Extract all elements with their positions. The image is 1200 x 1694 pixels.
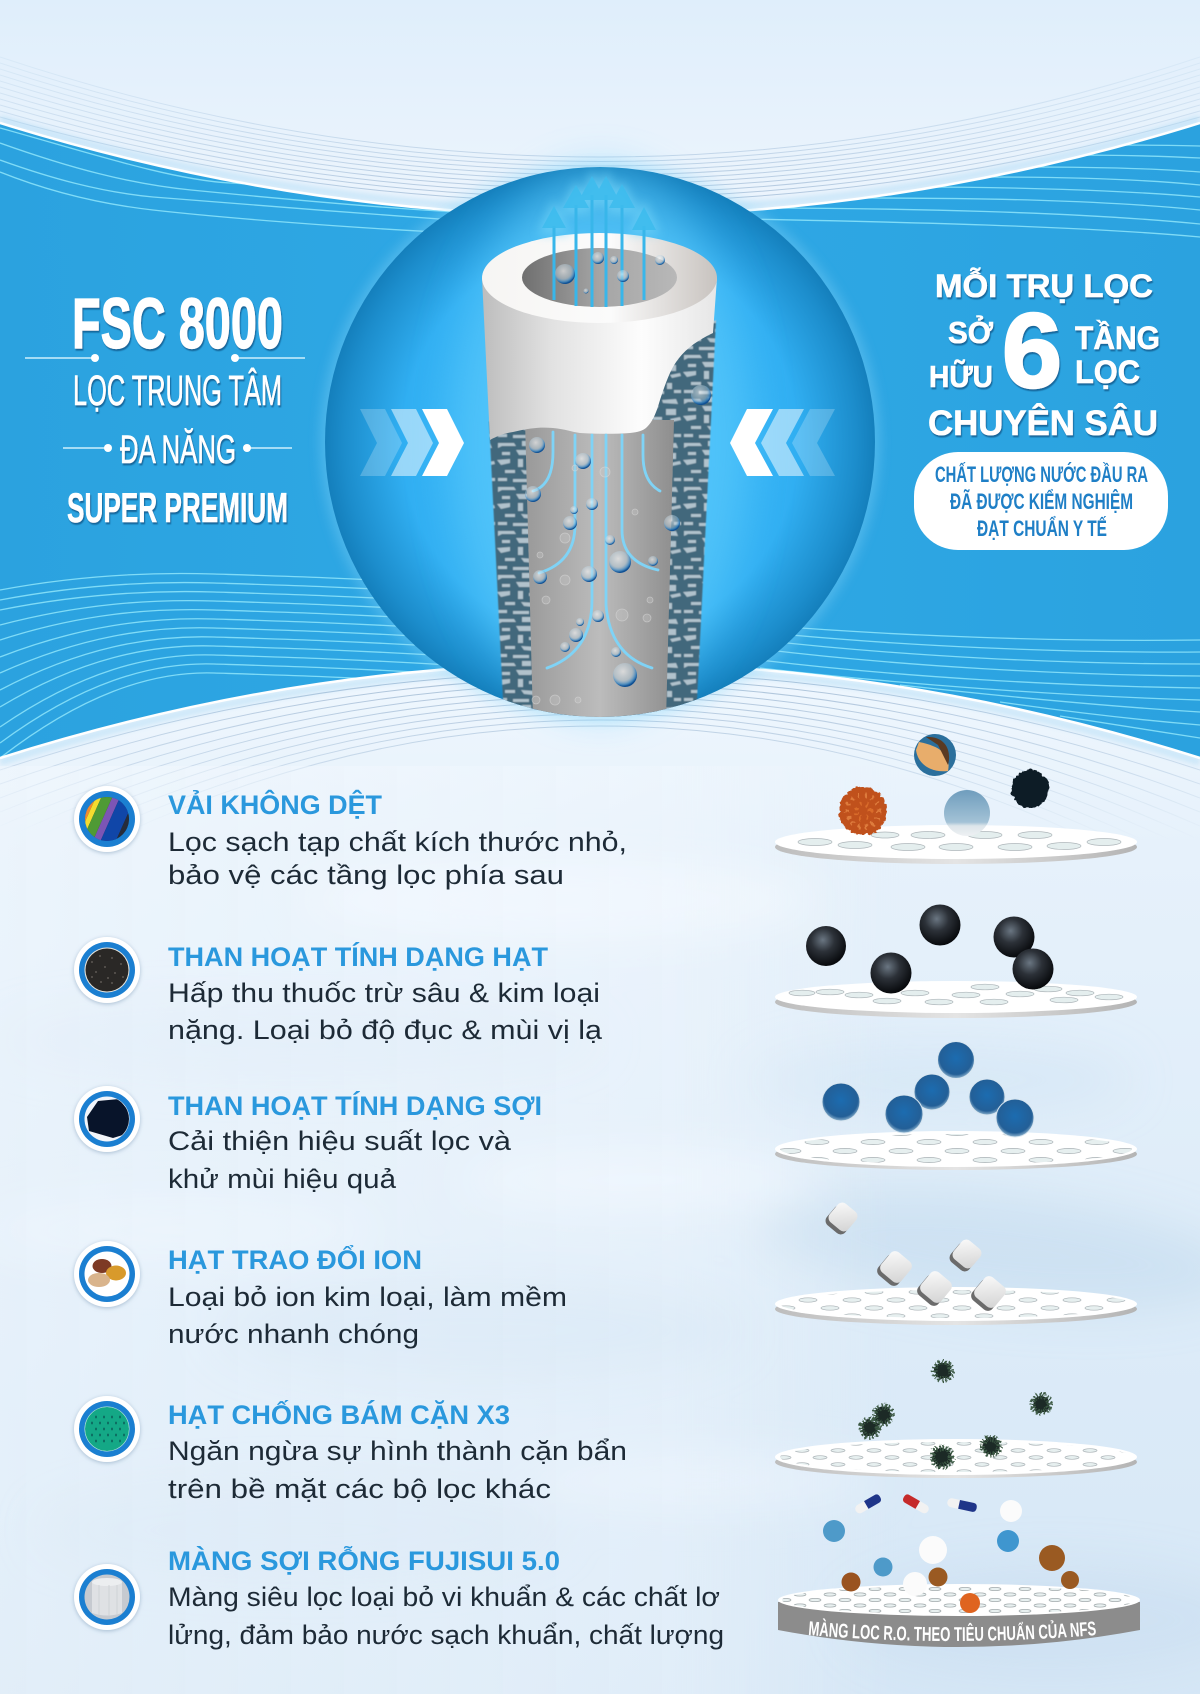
illustration: disk 1 with mixed particles bbox=[775, 734, 1137, 864]
description: nặng. Loại bỏ độ đục & mùi vị lạ bbox=[168, 1015, 603, 1045]
callout word: sở: SỞ bbox=[948, 314, 994, 350]
description: trên bề mặt các bộ lọc khác bbox=[168, 1474, 551, 1504]
bacteria bbox=[862, 1362, 1050, 1466]
six layers callout bbox=[914, 268, 1168, 550]
white outer shell bbox=[482, 278, 717, 440]
water ripple texture bbox=[790, 1068, 1200, 1622]
description: khử mùi hiệu quả bbox=[168, 1164, 397, 1194]
description: bảo vệ các tầng lọc phía sau bbox=[168, 860, 564, 890]
product title block bbox=[25, 285, 305, 531]
disk 1 bbox=[775, 825, 1137, 864]
description: nước nhanh chóng bbox=[168, 1319, 419, 1349]
divider with dots 2 bbox=[63, 444, 292, 452]
layer 4: hạt trao đổi ion bbox=[74, 1241, 567, 1349]
heading: THAN HOẠT TÍNH DẠNG SỢI bbox=[168, 1090, 542, 1121]
disk 2 bbox=[775, 981, 1137, 1018]
description bbox=[168, 978, 603, 1045]
membrane label: MÀNG LOC R.O. THEO TIÊU CHUẨN CỦA NFS bbox=[808, 1618, 1096, 1642]
big number 6: 6 bbox=[1002, 292, 1062, 410]
filter media layer bbox=[489, 320, 716, 720]
white pill bbox=[914, 452, 1168, 550]
illustration: disk 5 with bacteria bbox=[775, 1362, 1137, 1478]
pill text 3: ĐẠT CHUẨN Y TẾ bbox=[977, 516, 1107, 541]
description: Ngăn ngừa sự hình thành cặn bẩn bbox=[168, 1436, 627, 1466]
heading: HẠT CHỐNG BÁM CẶN X3 bbox=[168, 1398, 510, 1430]
icon: carbon fibre bbox=[74, 1086, 140, 1152]
callout word: hữu: HỮU bbox=[929, 358, 993, 394]
subtitle: super premium: SUPER PREMIUM bbox=[67, 484, 288, 531]
blue particles bbox=[822, 1042, 1034, 1137]
disk 6 body bbox=[778, 1602, 1140, 1647]
up arrows bbox=[538, 170, 660, 307]
top light panel bbox=[0, 0, 1200, 216]
disk 6 holes bbox=[782, 1586, 1136, 1614]
description bbox=[168, 827, 627, 890]
callout word: tầng: TẦNG bbox=[1075, 320, 1160, 356]
description bbox=[168, 1126, 512, 1194]
washed text panel bbox=[0, 766, 900, 1694]
description: Lọc sạch tạp chất kích thước nhỏ, bbox=[168, 827, 627, 857]
arrows: right chevrons pointing in bbox=[730, 409, 835, 476]
callout line: mỗi trụ lọc: MỖI TRỤ LỌC bbox=[935, 268, 1153, 304]
disk 3 bbox=[775, 1131, 1137, 1170]
disk 6 top bbox=[778, 1584, 1140, 1616]
layer 1: vải không dệt bbox=[67, 779, 627, 890]
carbon balls bbox=[806, 904, 1054, 994]
disk 5 bbox=[775, 1439, 1137, 1478]
icon: resin piles bbox=[74, 1241, 140, 1307]
illustration: disk 3 with fibre particles bbox=[775, 1042, 1137, 1170]
flow lines bbox=[533, 432, 660, 668]
disk 4 bbox=[775, 1287, 1137, 1325]
rust particle bbox=[839, 787, 887, 835]
inner hole bbox=[522, 248, 677, 307]
contaminant balls bbox=[823, 1500, 1079, 1613]
description: Màng siêu lọc loại bỏ vi khuẩn & các chất lơ bbox=[168, 1582, 720, 1612]
inner grey tube bbox=[525, 420, 674, 720]
title: FSC 8000: FSC 8000 bbox=[72, 285, 283, 364]
filter cartridge bbox=[482, 170, 717, 720]
illustration: R.O. membrane disk 6 with contaminants bbox=[778, 1494, 1140, 1647]
description bbox=[168, 1582, 724, 1650]
pills bbox=[854, 1493, 978, 1515]
heading: VẢI KHÔNG DỆT bbox=[168, 788, 383, 820]
description: Loại bỏ ion kim loại, làm mềm bbox=[168, 1282, 567, 1312]
description: lửng, đảm bảo nước sạch khuẩn, chất lượng bbox=[168, 1620, 724, 1650]
black rough particle bbox=[1011, 770, 1049, 808]
background: blue band bbox=[0, 0, 1200, 800]
layer 6: màng sợi rỗng bbox=[74, 1545, 724, 1650]
layer 5: hạt chống bám cặn bbox=[74, 1396, 627, 1504]
subtitle: lọc trung tâm: LỌC TRUNG TÂM bbox=[73, 367, 282, 415]
faint bubbles bbox=[532, 465, 653, 705]
heading: MÀNG SỢI RỖNG FUJISUI 5.0 bbox=[168, 1545, 560, 1576]
top ring bbox=[482, 233, 717, 323]
icon: hollow fibre membrane bbox=[74, 1564, 140, 1630]
layer 3: than hoạt tính dạng sợi bbox=[74, 1086, 542, 1194]
icon: anti-scale mesh bbox=[74, 1396, 140, 1462]
description: Hấp thu thuốc trừ sâu & kim loại bbox=[168, 978, 600, 1008]
ion crystals bbox=[823, 1200, 1008, 1313]
description: Cải thiện hiệu suất lọc và bbox=[168, 1126, 512, 1156]
blue band wave lines bbox=[0, 128, 1200, 758]
illustration: disk 2 with carbon balls bbox=[775, 904, 1137, 1018]
mineral particle bbox=[914, 734, 956, 776]
description bbox=[168, 1282, 567, 1349]
layer 2: than hoạt tính dạng hạt bbox=[74, 937, 603, 1045]
callout word: lọc: LỌC bbox=[1075, 354, 1140, 390]
heading: THAN HOẠT TÍNH DẠNG HẠT bbox=[168, 941, 549, 972]
bottom light panel bbox=[0, 663, 1200, 1694]
water bubbles bbox=[525, 252, 711, 687]
icon: fabric bbox=[72, 784, 142, 856]
heading: HẠT TRAO ĐỔI ION bbox=[168, 1244, 422, 1275]
callout line: chuyên sâu: CHUYÊN SÂU bbox=[928, 403, 1158, 443]
illustration: disk 4 with crystals bbox=[775, 1200, 1137, 1325]
arrows: left chevrons pointing in bbox=[360, 409, 464, 476]
icon: granular carbon bbox=[74, 937, 140, 1003]
grey sediment ball bbox=[944, 790, 990, 836]
subtitle: đa năng: ĐA NĂNG bbox=[120, 427, 236, 472]
description bbox=[168, 1436, 627, 1504]
divider with dots bbox=[25, 354, 305, 362]
central circle bbox=[320, 162, 880, 722]
